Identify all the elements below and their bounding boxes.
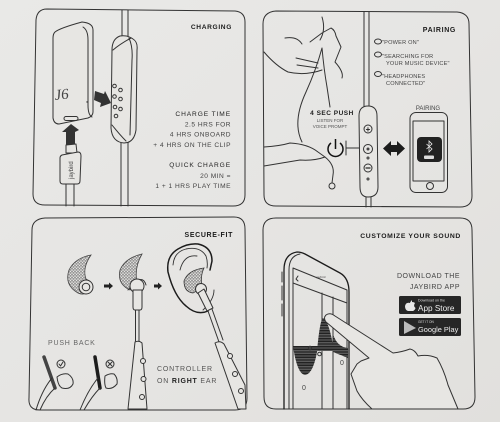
text: quick charge [155, 162, 231, 190]
text: quick charge: QUICK CHARGE [169, 162, 231, 169]
icon: power [328, 139, 362, 156]
text: quick charge: 20 MIN = [200, 173, 231, 180]
list: voice prompts: YOUR MUSIC DEVICE" [386, 61, 450, 67]
icon: usb cable [60, 144, 81, 206]
arrow: step two [154, 282, 162, 290]
text: controller on right ear: ON RIGHT EAR [157, 378, 217, 385]
heading: pairing: PAIRING [423, 27, 456, 34]
text: 4 sec push: VOICE PROMPT [313, 124, 347, 129]
panel: secure-fit [29, 217, 247, 410]
icon: ear gel [68, 255, 93, 294]
icon: earbud tip [329, 183, 335, 189]
list: voice prompts [374, 39, 450, 87]
illustration: upper body and hand [264, 17, 342, 107]
text: charge time: 4 HRS ONBOARD [170, 132, 231, 138]
text: download the jaybird app [397, 273, 460, 291]
text: download the jaybird app: DOWNLOAD THE [397, 273, 460, 280]
text: charge time: CHARGE TIME [175, 111, 231, 118]
icon: charging case: J6 [54, 87, 70, 104]
icon: controller on ear [198, 289, 246, 409]
text: controller on right ear: CONTROLLER [157, 366, 213, 373]
icon: phone with equalizer: jaybird [316, 275, 326, 279]
panel: customize your sound [263, 218, 475, 409]
chart: sound wave [293, 318, 348, 375]
arrow: case to clip [94, 91, 111, 107]
button: google play: Google Play [418, 325, 459, 334]
button: google play [399, 318, 461, 336]
list: voice prompts: "POWER ON" [382, 40, 419, 46]
label: pairing phone: PAIRING [416, 106, 440, 112]
icon: phone pairing [410, 112, 448, 192]
text: charge time: 2.5 HRS FOR [185, 122, 231, 128]
cable: pairing panel [364, 12, 371, 207]
icon: phone with equalizer: 0 [340, 360, 344, 367]
icon: charging case [53, 22, 93, 124]
icon: phone with equalizer: 0 [302, 385, 306, 392]
panel: pairing [263, 11, 472, 207]
button: app store: App Store [418, 304, 455, 313]
heading: charging: CHARGING [191, 24, 232, 31]
illustration: hand pressing [324, 314, 458, 409]
heading: secure-fit: SECURE-FIT [184, 232, 233, 239]
list: voice prompts: "SEARCHING FOR [382, 54, 433, 60]
text: charge time: + 4 HRS ON THE CLIP [153, 142, 231, 149]
icon: ear [168, 244, 214, 313]
icon: charging clip [111, 36, 137, 143]
icon: controller [359, 106, 378, 197]
cable: charging panel [121, 10, 128, 206]
illustration: cable loop [298, 48, 327, 142]
arrow: cable to case [62, 124, 79, 145]
text: 4 sec push: LISTEN FOR [317, 118, 344, 123]
arrow: double headed [383, 141, 405, 156]
icon: incorrect ear tip [80, 357, 117, 410]
button: app store [399, 296, 461, 314]
icon: controller: + [366, 125, 371, 134]
list: voice prompts: CONNECTED" [386, 81, 425, 87]
text: charge time [153, 111, 231, 149]
icon: correct ear tip [36, 357, 73, 410]
heading: customize your sound: CUSTOMIZE YOUR SOUND [360, 233, 461, 240]
text: download the jaybird app: JAYBIRD APP [410, 284, 460, 291]
panel: charging [33, 9, 245, 206]
text: push back: PUSH BACK [48, 340, 96, 347]
button: app store: Download on the [418, 298, 445, 302]
illustration: lower hand and earbud [264, 143, 333, 183]
icon: phone with equalizer [282, 252, 349, 409]
text: 4 sec push [310, 110, 354, 129]
arrow: step one [104, 282, 113, 290]
text: quick charge: 1 + 1 HRS PLAY TIME [155, 183, 231, 190]
text: controller on right ear [157, 366, 217, 385]
icon: earbud with gel [119, 254, 147, 409]
text: 4 sec push: 4 SEC PUSH [310, 110, 354, 117]
icon: usb cable: jaybird [69, 161, 75, 180]
list: voice prompts: "HEADPHONES [382, 74, 425, 80]
button: google play: GET IT ON [418, 320, 435, 324]
